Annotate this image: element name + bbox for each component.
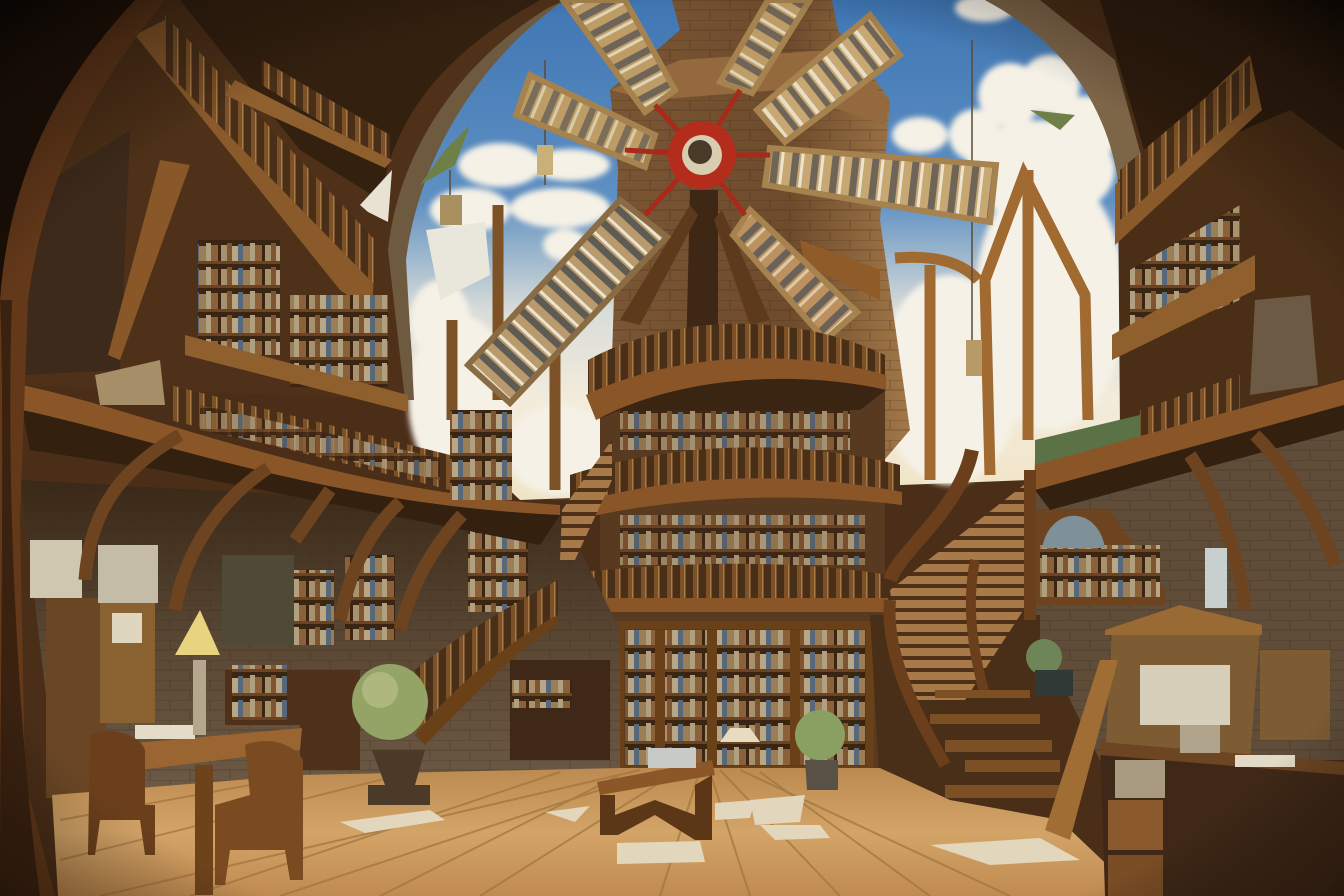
blade lower left (468, 200, 667, 403)
hub (625, 90, 770, 215)
blade top left (563, 0, 675, 112)
arch rim stone (388, 0, 565, 400)
clouds (408, 0, 1125, 495)
plants (352, 639, 1073, 805)
balcony tier 1 (588, 324, 885, 400)
right upper wood structure (985, 0, 1344, 430)
left balcony (22, 360, 560, 630)
floor (52, 768, 1140, 896)
scattered papers (340, 795, 1080, 865)
blade lower right (733, 210, 857, 340)
balcony upper left (135, 20, 375, 312)
sky opening (405, 0, 1125, 500)
left desk and chairs (88, 610, 303, 895)
blade top (720, 0, 810, 93)
left foreground arch beam (0, 0, 165, 896)
center table with books (597, 728, 760, 840)
blade left (516, 75, 655, 167)
staircases (415, 440, 1065, 798)
lower-right desk (1045, 650, 1344, 896)
balcony tier 3 (558, 564, 888, 600)
balcony tier 2 (570, 447, 900, 510)
blade upper right (757, 15, 900, 142)
hanging lanterns and paper (420, 40, 1075, 376)
right balcony and lower right wall (1030, 375, 1344, 760)
upper-left wood structure (0, 0, 565, 412)
struts (85, 435, 462, 630)
blade right (765, 148, 996, 222)
lower-left stone wall (20, 480, 620, 810)
windmill tower (600, 0, 910, 770)
bookcases (198, 240, 280, 355)
tower interior behind tiers (600, 385, 885, 770)
tower bookcases and balconies (556, 324, 902, 770)
arched wooden frames right (452, 170, 1088, 490)
hanging paper (360, 170, 392, 222)
blades (468, 0, 996, 403)
